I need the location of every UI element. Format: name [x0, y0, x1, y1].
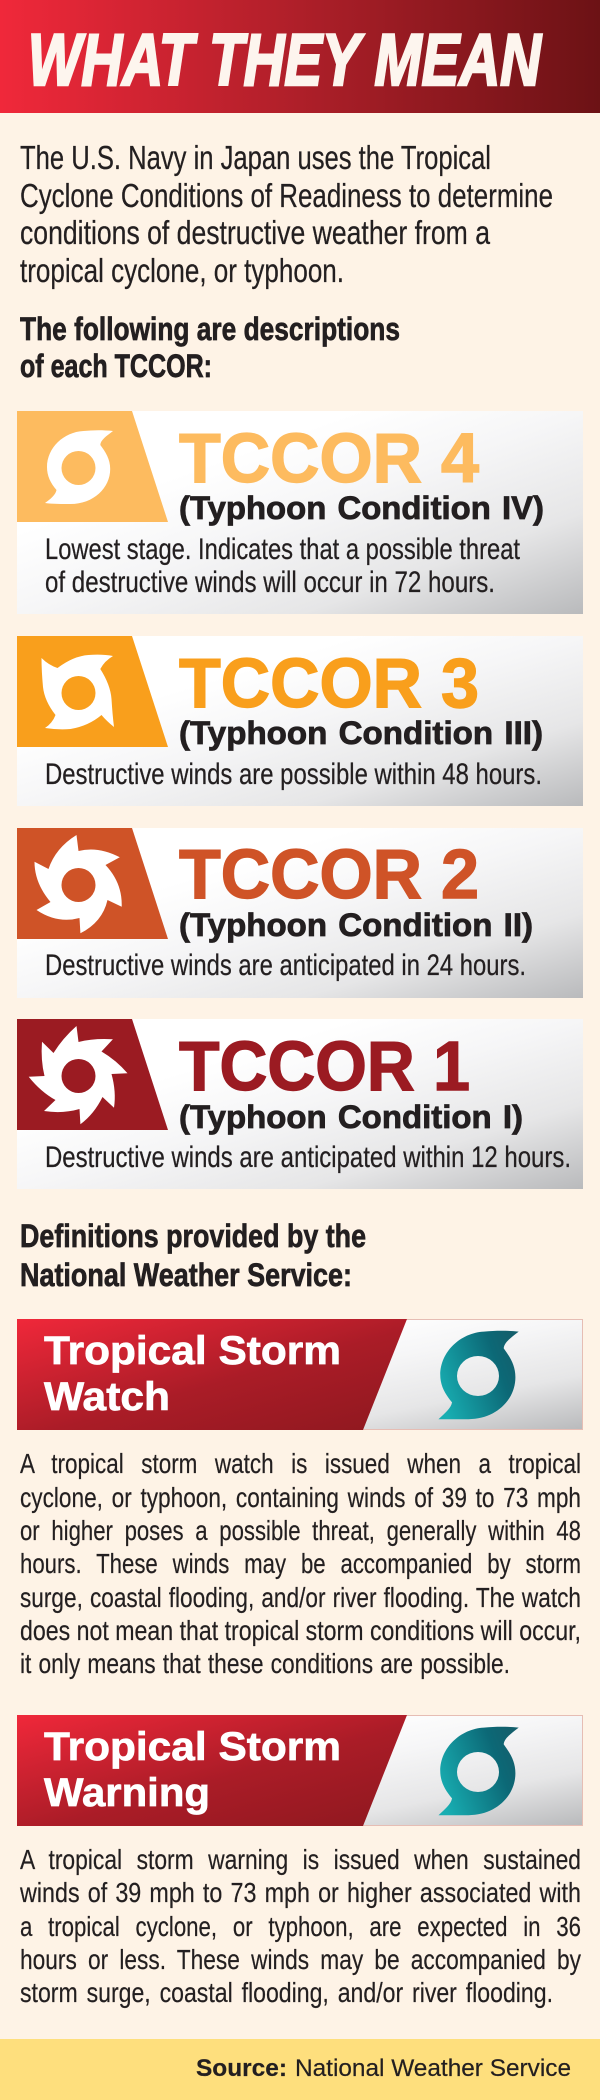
TCCOR 1 subtitle: (Typhoon Condition I)	[179, 1099, 523, 1135]
heading: definitions: National Weather Service:	[20, 1257, 352, 1293]
source text: Source:	[196, 2055, 287, 2082]
panel: TCCOR 3	[17, 636, 583, 806]
panel: TCCOR 4	[17, 411, 583, 614]
warning body text	[19, 1844, 581, 2008]
warning banner title: Warning	[44, 1771, 210, 1815]
watch body text	[20, 1448, 581, 1679]
TCCOR 4 subtitle: (Typhoon Condition IV)	[179, 490, 544, 526]
TCCOR 4 description	[45, 533, 521, 599]
header banner	[0, 0, 600, 113]
heading: definitions: Definitions provided by the	[20, 1218, 366, 1254]
TCCOR 4 heading: TCCOR 4	[179, 419, 479, 497]
icon: teal storm	[438, 1727, 519, 1815]
watch banner title: Tropical Storm	[44, 1329, 341, 1373]
TCCOR 2 heading: TCCOR 2	[179, 835, 479, 913]
heading: definitions	[20, 1218, 366, 1293]
intro paragraph	[20, 139, 553, 289]
icon: TCCOR 4 storm	[45, 430, 113, 504]
watch banner title	[44, 1329, 341, 1419]
TCCOR 3 heading: TCCOR 3	[179, 644, 479, 722]
TCCOR 4 description: of destructive winds will occur in 72 hours.	[45, 566, 495, 599]
source text: National Weather Service	[295, 2055, 571, 2082]
intro paragraph: conditions of destructive weather from a	[20, 214, 491, 251]
panel: TCCOR 2	[17, 828, 583, 998]
heading: descriptions: The following are descriptions	[20, 311, 400, 347]
TCCOR 2 subtitle: (Typhoon Condition II)	[179, 907, 533, 943]
heading: descriptions: of each TCCOR:	[20, 348, 212, 384]
intro paragraph: tropical cyclone, or typhoon.	[20, 252, 344, 289]
watch banner title: Watch	[44, 1375, 170, 1419]
icon: teal storm	[438, 1331, 519, 1419]
heading: descriptions	[20, 311, 400, 384]
panel: TCCOR 1	[17, 1019, 583, 1189]
warning banner title: Tropical Storm	[44, 1725, 341, 1769]
panel: tropical storm watch banner	[17, 1319, 582, 1430]
warning banner title	[44, 1725, 341, 1815]
panel: tropical storm warning banner	[17, 1715, 582, 1826]
icon: TCCOR 1 storm	[29, 1026, 128, 1124]
TCCOR 3 subtitle: (Typhoon Condition III)	[179, 715, 543, 751]
source bar	[0, 2039, 600, 2100]
TCCOR 1 heading: TCCOR 1	[179, 1027, 470, 1105]
icon: TCCOR 2 storm	[34, 835, 122, 933]
icon: TCCOR 3 storm	[42, 655, 114, 729]
